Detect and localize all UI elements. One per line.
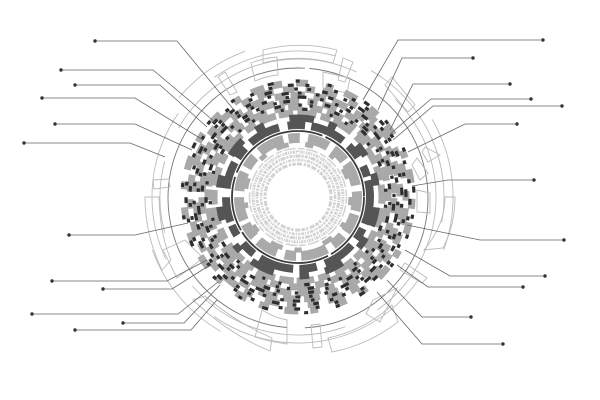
leader end dots [22,38,566,346]
outer light block layers [154,53,442,341]
leader lines top-left [24,41,234,157]
dark blocks ring [190,89,406,305]
thin black ring [232,131,364,263]
dark ring arc [157,57,439,339]
leader lines bottom-left [32,223,220,330]
fine texture rings [250,148,346,246]
leader lines bottom-right [377,225,564,344]
black pixel clusters [141,40,455,354]
outlined segments [145,45,455,352]
thin outer arcs [86,0,510,400]
light inner blocks [224,123,372,271]
leader lines top-right [363,40,562,186]
